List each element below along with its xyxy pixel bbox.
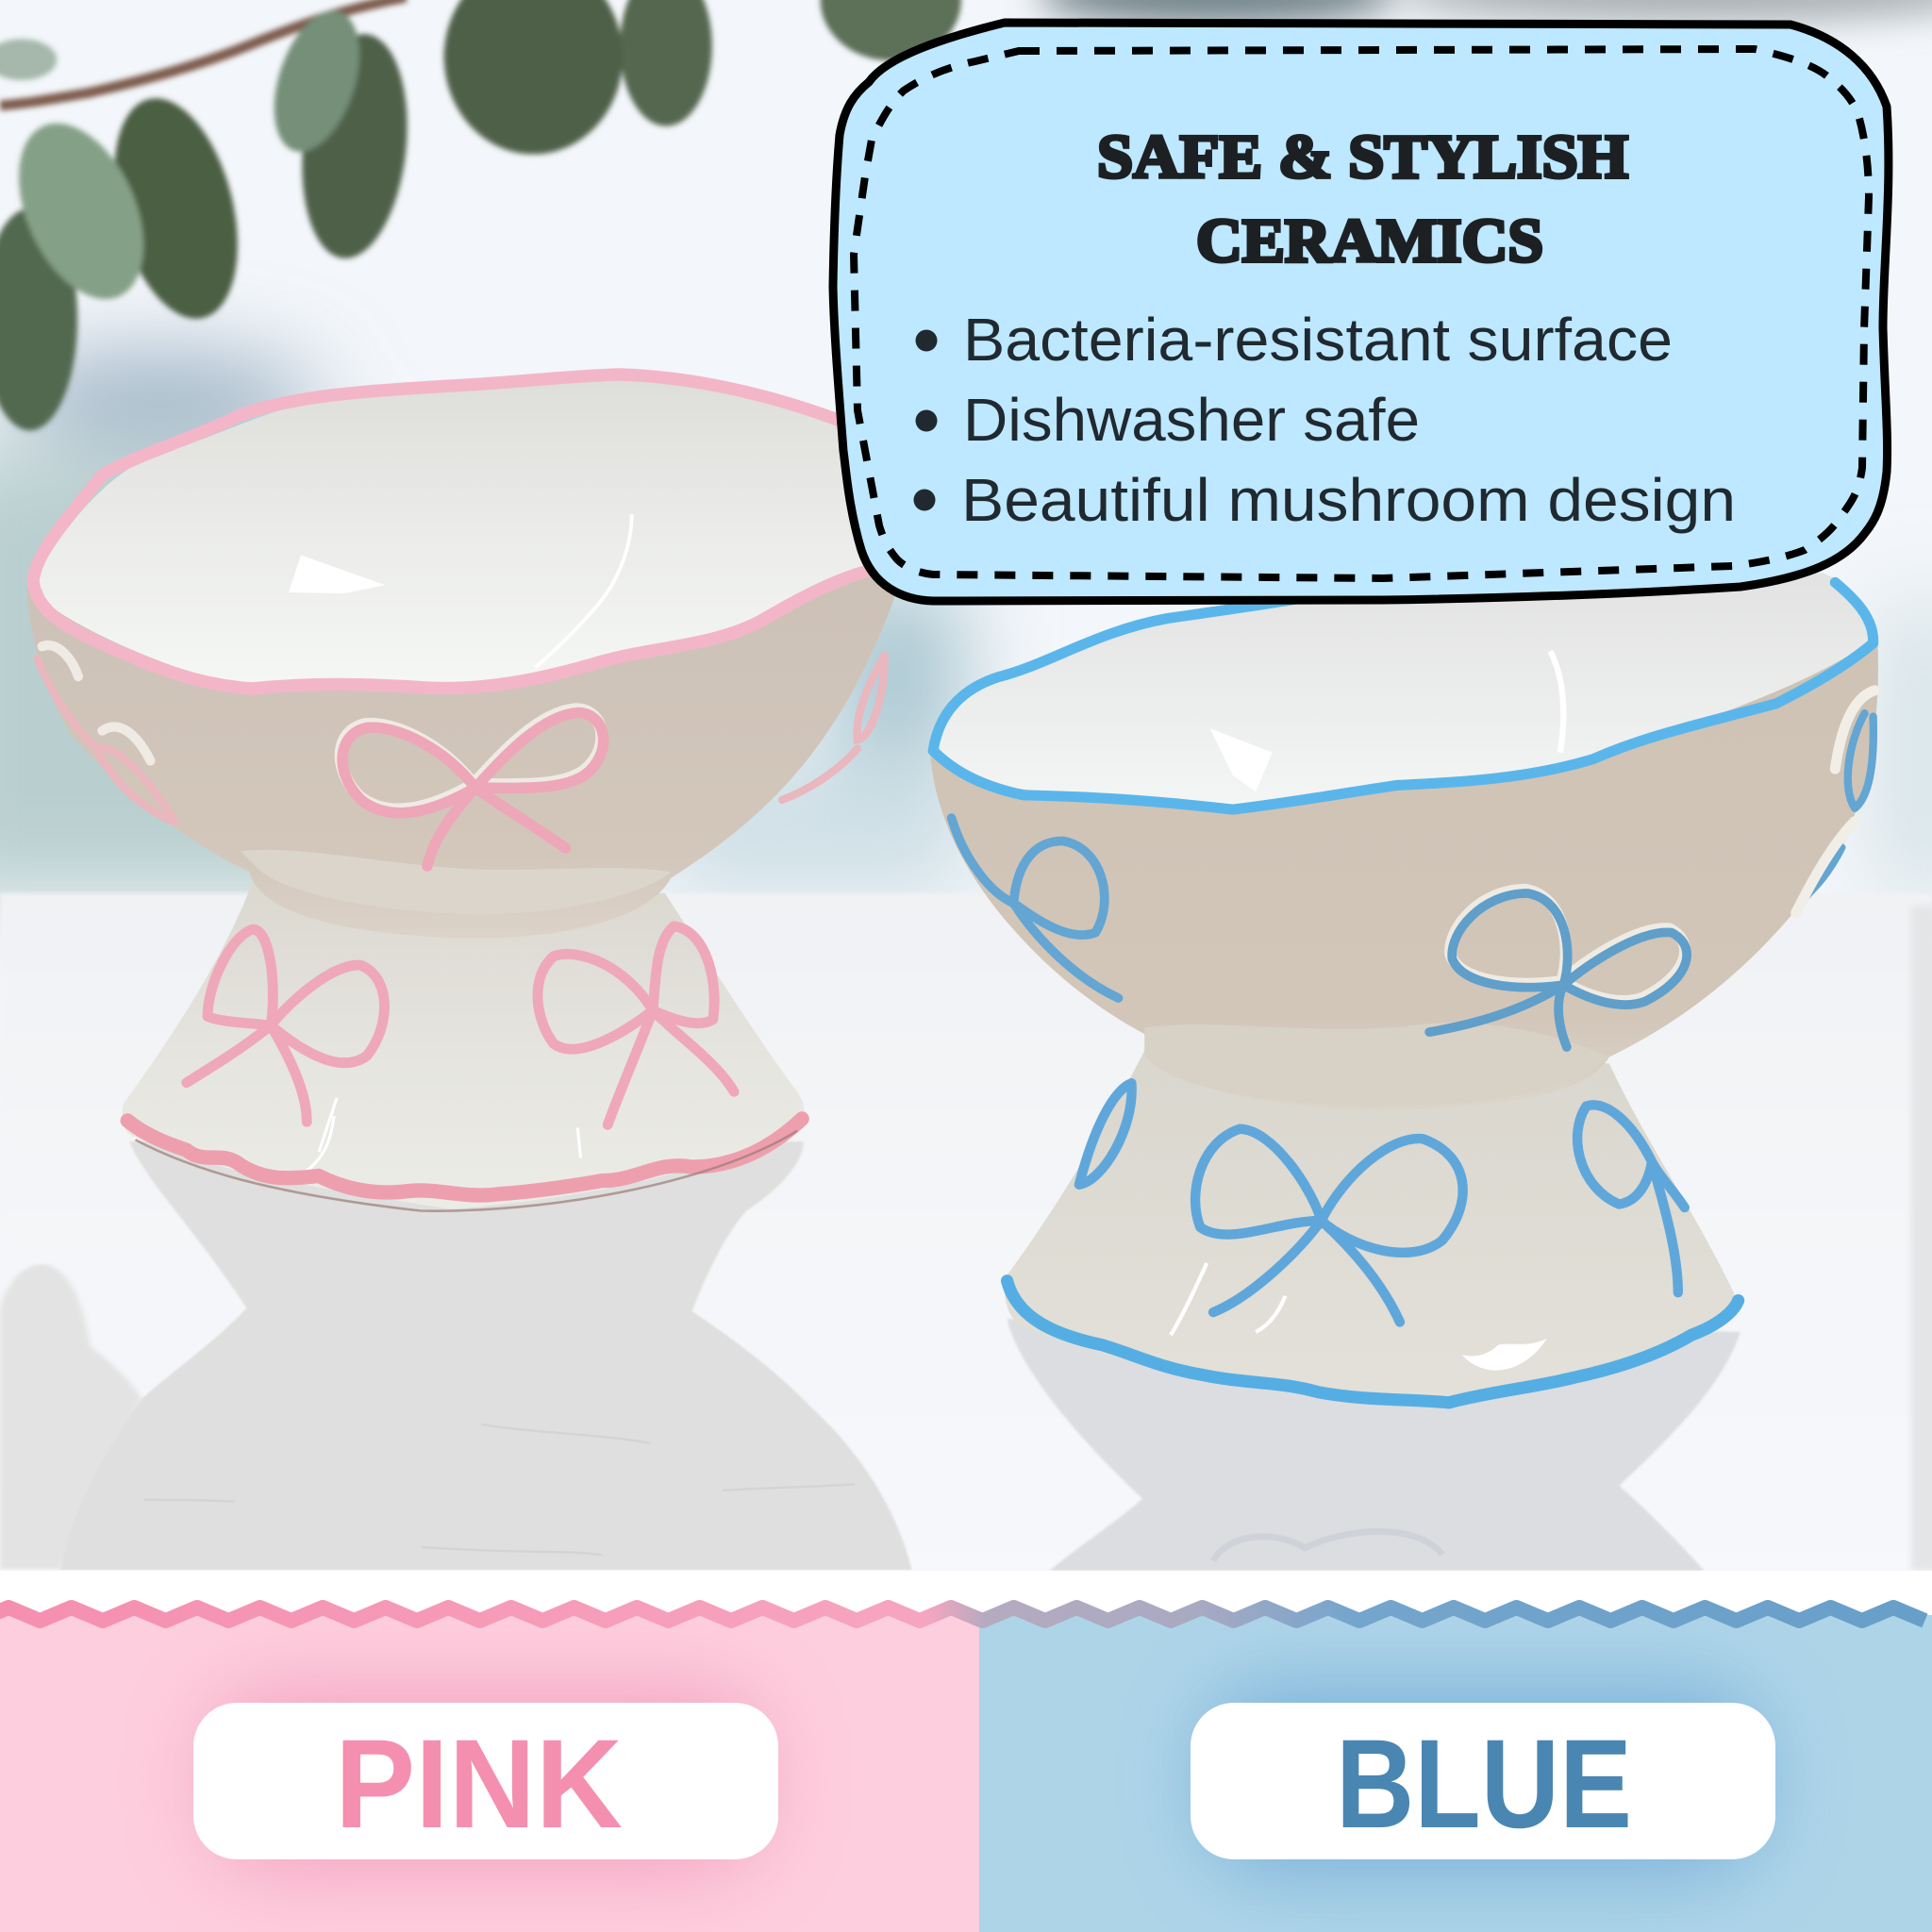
bowl body <box>27 520 896 939</box>
bows on pedestal <box>187 926 734 1124</box>
blurred background <box>0 0 1932 945</box>
interior highlights <box>289 555 385 593</box>
neck highlights <box>241 850 671 914</box>
marble table <box>0 892 1928 934</box>
pink panel <box>0 1615 979 1932</box>
bows on pedestal <box>1079 1083 1685 1322</box>
bowl body <box>930 644 1878 1109</box>
bullet list <box>913 306 1736 534</box>
front bow on body <box>341 709 604 866</box>
blue ceramic bowl <box>930 573 1878 1407</box>
bowl interior <box>935 573 1874 808</box>
wavy ric-rac divider <box>0 1607 1924 1621</box>
neck highlights <box>1144 1023 1609 1106</box>
pink ceramic bowl <box>27 375 896 1211</box>
pedestal <box>123 881 805 1209</box>
bows on body <box>952 713 1874 1047</box>
bullet list: Bacteria-resistant surface <box>963 306 1673 374</box>
pedestal highlights <box>304 1098 580 1173</box>
rim <box>933 582 1874 809</box>
rim <box>33 375 891 689</box>
side bows on body <box>38 645 885 821</box>
branch with leaves <box>0 0 961 430</box>
blue panel <box>979 1615 1932 1932</box>
pink bowl reflection <box>0 1141 912 1570</box>
pedestal highlights <box>1462 1339 1547 1371</box>
pink label pill <box>193 1703 778 1859</box>
bullet list: Beautiful mushroom design <box>961 466 1736 534</box>
blue scalloped foot band <box>1008 1281 1739 1403</box>
blue bowl reflection <box>1008 1319 1740 1571</box>
bullet list: Dishwasher safe <box>963 386 1420 454</box>
colour options band <box>0 1571 1932 1932</box>
callout background with hand drawn outline <box>833 23 1889 601</box>
callout heading: CERAMICS <box>1196 207 1543 275</box>
callout heading: SAFE & STYLISH <box>1097 123 1628 192</box>
callout panel: safe and stylish ceramics <box>833 23 1889 601</box>
bowl interior <box>36 375 896 689</box>
callout heading <box>1097 123 1628 275</box>
blue label pill: BLUE <box>1336 1714 1632 1855</box>
pink scalloped foot band <box>127 1119 802 1195</box>
interior highlights <box>1210 728 1273 791</box>
pink label pill: PINK <box>335 1714 623 1855</box>
blue label pill <box>1191 1703 1775 1859</box>
pedestal <box>1004 1050 1739 1407</box>
embossed outline highlights <box>1796 691 1874 913</box>
